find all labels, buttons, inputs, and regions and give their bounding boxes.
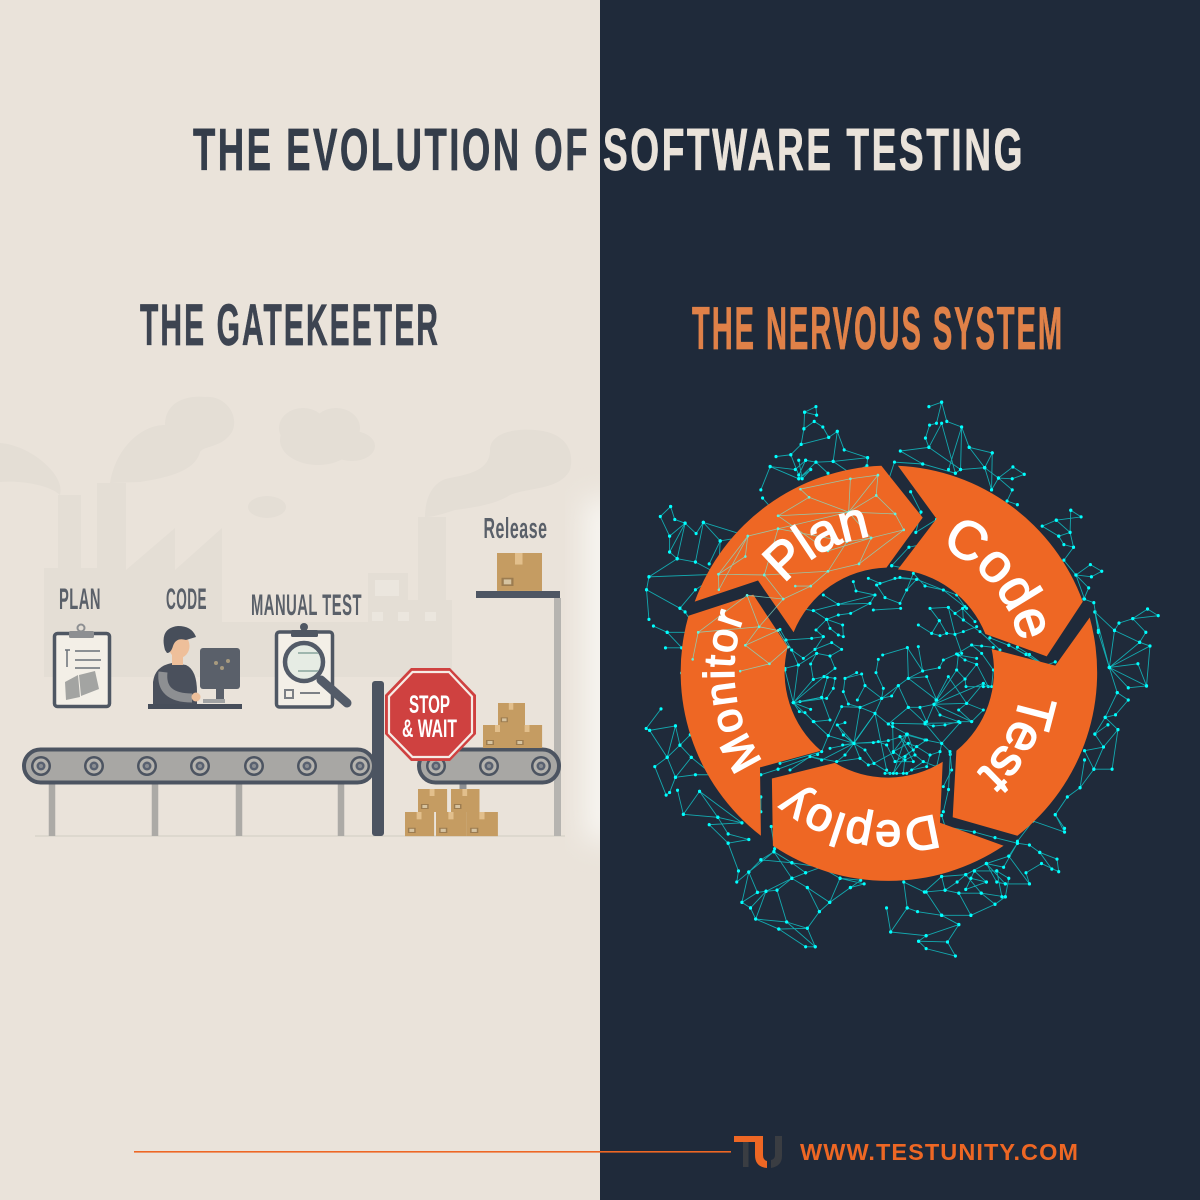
label: test: Test <box>976 701 1057 793</box>
arrow: test <box>953 618 1097 836</box>
network overlay on plan and monitor arrows <box>693 475 904 671</box>
text: PLAN <box>59 583 101 616</box>
footer rule <box>134 1151 731 1153</box>
label: monitor: Monitor <box>702 608 762 774</box>
title: THE EVOLUTION OF <box>193 117 590 183</box>
label: plan: Plan <box>761 510 868 582</box>
factory background illustration <box>0 397 571 677</box>
floor line <box>35 835 565 837</box>
conveyor belt: after gate <box>419 750 559 790</box>
icon: released box <box>497 553 542 591</box>
stop sign <box>385 668 476 761</box>
panel: the gatekeeper background <box>0 0 625 1200</box>
panel: the nervous system background <box>600 0 1200 1200</box>
conveyor belt: before gate <box>24 750 374 836</box>
heading: the gatekeeter: THE GATEKEETER <box>140 293 440 358</box>
label: release: Release <box>484 513 548 545</box>
release shelf and post <box>476 591 561 836</box>
stop sign: STOP <box>409 691 450 719</box>
gate post <box>372 681 384 836</box>
logo: testunity <box>734 1136 782 1168</box>
label: deploy: Deploy <box>777 788 940 850</box>
text: CODE <box>166 583 207 616</box>
boxes on belt <box>483 703 542 748</box>
waiting boxes pile <box>405 789 498 836</box>
stop sign: & WAIT <box>402 715 457 743</box>
label: code: Code <box>948 520 1046 638</box>
arrow: deploy <box>772 762 1004 881</box>
arrow: monitor <box>681 595 821 836</box>
arrow: plan <box>695 466 923 632</box>
icon: plan clipboard <box>54 624 110 706</box>
arrow: code <box>898 466 1083 656</box>
devops cycle ring <box>680 466 1098 881</box>
text: MANUAL TEST <box>251 589 362 622</box>
website url: WWW.TESTUNITY.COM <box>800 1139 1078 1165</box>
neural network behind the cycle <box>646 402 1158 956</box>
icon: developer at computer <box>148 626 242 709</box>
icon: manual test clipboard with magnifier <box>276 623 347 707</box>
